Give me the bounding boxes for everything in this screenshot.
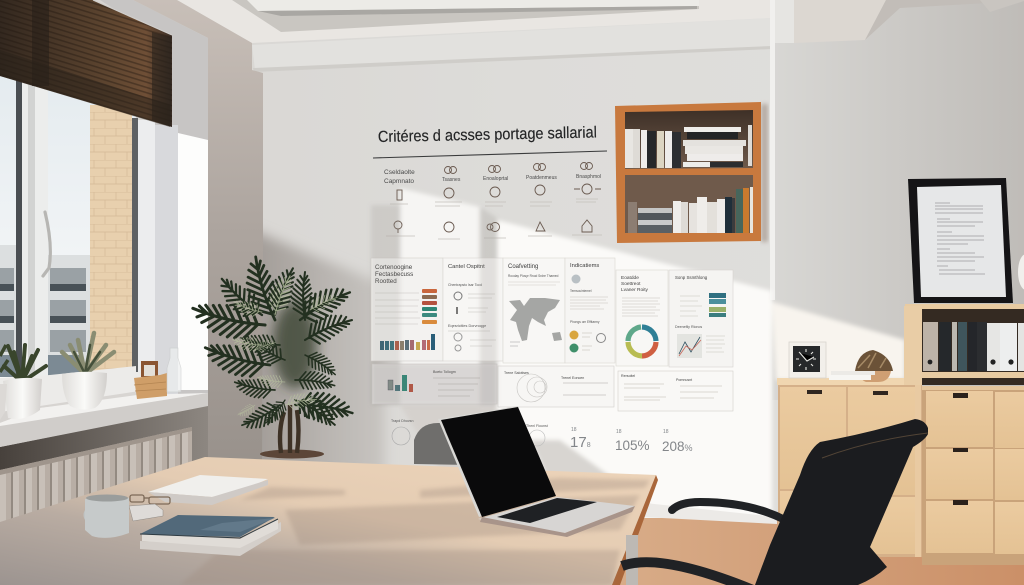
criteria grid column headings: Capmnato <box>384 178 414 185</box>
card: text and icons: Eqesricitles Dorvroqge <box>448 324 486 328</box>
report cards row 1 <box>371 258 733 367</box>
criteria grid captions <box>386 199 602 239</box>
criteria grid column headings: Bnasphmol <box>576 174 601 180</box>
plant in bowl and book <box>829 350 893 382</box>
chair arm rear <box>672 502 785 520</box>
statistics row: Trapd Dhovsn <box>391 419 413 423</box>
stack of books <box>140 515 281 556</box>
window <box>0 70 155 412</box>
office chair <box>622 419 928 585</box>
card: indications <box>565 258 615 363</box>
card: indications: Phongs om Effitarmy <box>570 320 600 324</box>
statistic 17: 18 <box>571 427 577 433</box>
statistic 208% <box>662 429 693 454</box>
poster title: Critéres d acsses portage sallarial <box>378 124 597 146</box>
window sill <box>0 393 208 447</box>
dense foliage mass <box>273 301 317 389</box>
wall shelf with books <box>615 102 768 243</box>
sunlight patches on wall <box>400 188 905 520</box>
desk shadow bands <box>180 478 650 585</box>
potted plants on sill <box>0 333 181 420</box>
window recess <box>100 0 208 395</box>
card: bar chart and tags <box>371 258 443 361</box>
statistic 208%: 18 <box>663 429 669 435</box>
card: indications: Temsouintemel <box>570 289 592 293</box>
roller blind <box>0 0 172 127</box>
criteria grid column headings: Cseldaolte <box>384 169 415 176</box>
floor <box>612 518 1024 585</box>
cabinet left <box>777 378 922 557</box>
card: world map: Coafvetting <box>508 264 538 270</box>
indoor palm plant <box>188 253 356 458</box>
card: world map: Rooday Plosyr Rnod Srdre Thamed <box>508 274 559 278</box>
statistic 105% <box>615 429 650 453</box>
statistic 105%: 105% <box>615 438 650 453</box>
card: data list and line chart: Deenefily Rlonos <box>675 325 702 329</box>
right wall <box>772 0 1024 400</box>
statistic 208%: 208% <box>662 439 693 454</box>
card: rings: Trene Salotises <box>504 371 529 375</box>
framed document <box>908 178 1013 303</box>
card: text: Pomnusnt <box>676 378 692 382</box>
open notebook <box>148 475 268 505</box>
criteria grid column headings: Enoaloprtal <box>483 176 508 182</box>
card: donut chart: Eoatdde <box>621 275 639 281</box>
small book <box>129 504 163 521</box>
radiator <box>0 427 192 523</box>
card: rings: Trenel Eoncen <box>561 376 584 380</box>
statistics row <box>391 419 693 454</box>
coffee mug <box>85 494 129 538</box>
card: text and icons <box>443 258 503 361</box>
brick building <box>90 105 132 377</box>
card: bar chart and tags: Rootted <box>375 278 397 285</box>
card: bar chart and tags: Cortenoogine <box>375 264 413 271</box>
card: small bars: Boeto Tollogm <box>433 370 456 374</box>
card: rings <box>498 366 614 407</box>
binders <box>923 322 1024 371</box>
cabinet right with shelf <box>904 304 1024 565</box>
woven basket with photo frame <box>134 361 167 399</box>
desk <box>0 457 658 585</box>
card: world map <box>503 258 565 363</box>
skirting board <box>643 503 777 524</box>
criteria grid icons <box>394 162 601 233</box>
donut chart <box>628 327 656 356</box>
glasses <box>130 495 170 504</box>
white sphere ornament <box>1018 254 1024 290</box>
statistic 105%: 18 <box>616 429 622 435</box>
plant 2 <box>62 333 114 410</box>
criteria poster <box>373 124 607 239</box>
card: donut chart: Lvaner Roity <box>621 287 649 293</box>
card: data list and line chart <box>669 270 733 367</box>
chair backrest <box>755 419 928 585</box>
criteria grid column headings: Poatdenmeus <box>526 175 557 181</box>
card: bar chart and tags: Fectasbecuss <box>375 271 413 278</box>
plant 1 <box>3 345 46 419</box>
statistic 17: 178 <box>570 434 591 451</box>
card: text and icons: Chentrapsto lsar Tocd <box>448 283 482 287</box>
window handle <box>43 212 50 276</box>
shaded lower-left wall <box>240 225 385 475</box>
report cards row 2 <box>372 364 733 411</box>
card: indications: Indicatiems <box>570 263 599 269</box>
glass bottle <box>167 348 181 392</box>
card: small bars <box>372 364 497 404</box>
criteria grid column headings <box>384 169 601 185</box>
line chart <box>677 334 702 358</box>
card: text <box>618 371 733 411</box>
plant 3 left <box>0 345 8 420</box>
books top shelf <box>625 125 752 168</box>
card: donut chart: Soettreot <box>621 281 641 287</box>
card: text and icons: Cantel Ospitnt <box>448 264 485 270</box>
criteria grid column headings: Tsasnes <box>442 177 461 183</box>
chair arm front <box>622 562 753 585</box>
apartment building <box>0 245 90 377</box>
card: text: Rersoitel <box>621 374 635 378</box>
card: data list and line chart: Sonp Ssmthlong <box>675 275 708 280</box>
grey chair headrest behind laptop <box>414 423 470 465</box>
statistics row: Thenl Flounst <box>526 424 548 428</box>
desk clock <box>789 342 826 378</box>
wall under sill <box>0 405 208 540</box>
bar chart <box>380 334 435 350</box>
left wall reveal <box>133 0 263 470</box>
wall shadows over posters <box>371 205 497 405</box>
ceiling and beams <box>177 0 1024 300</box>
card: donut chart <box>616 270 668 366</box>
books lower shelf <box>628 187 753 233</box>
laptop <box>438 406 635 537</box>
